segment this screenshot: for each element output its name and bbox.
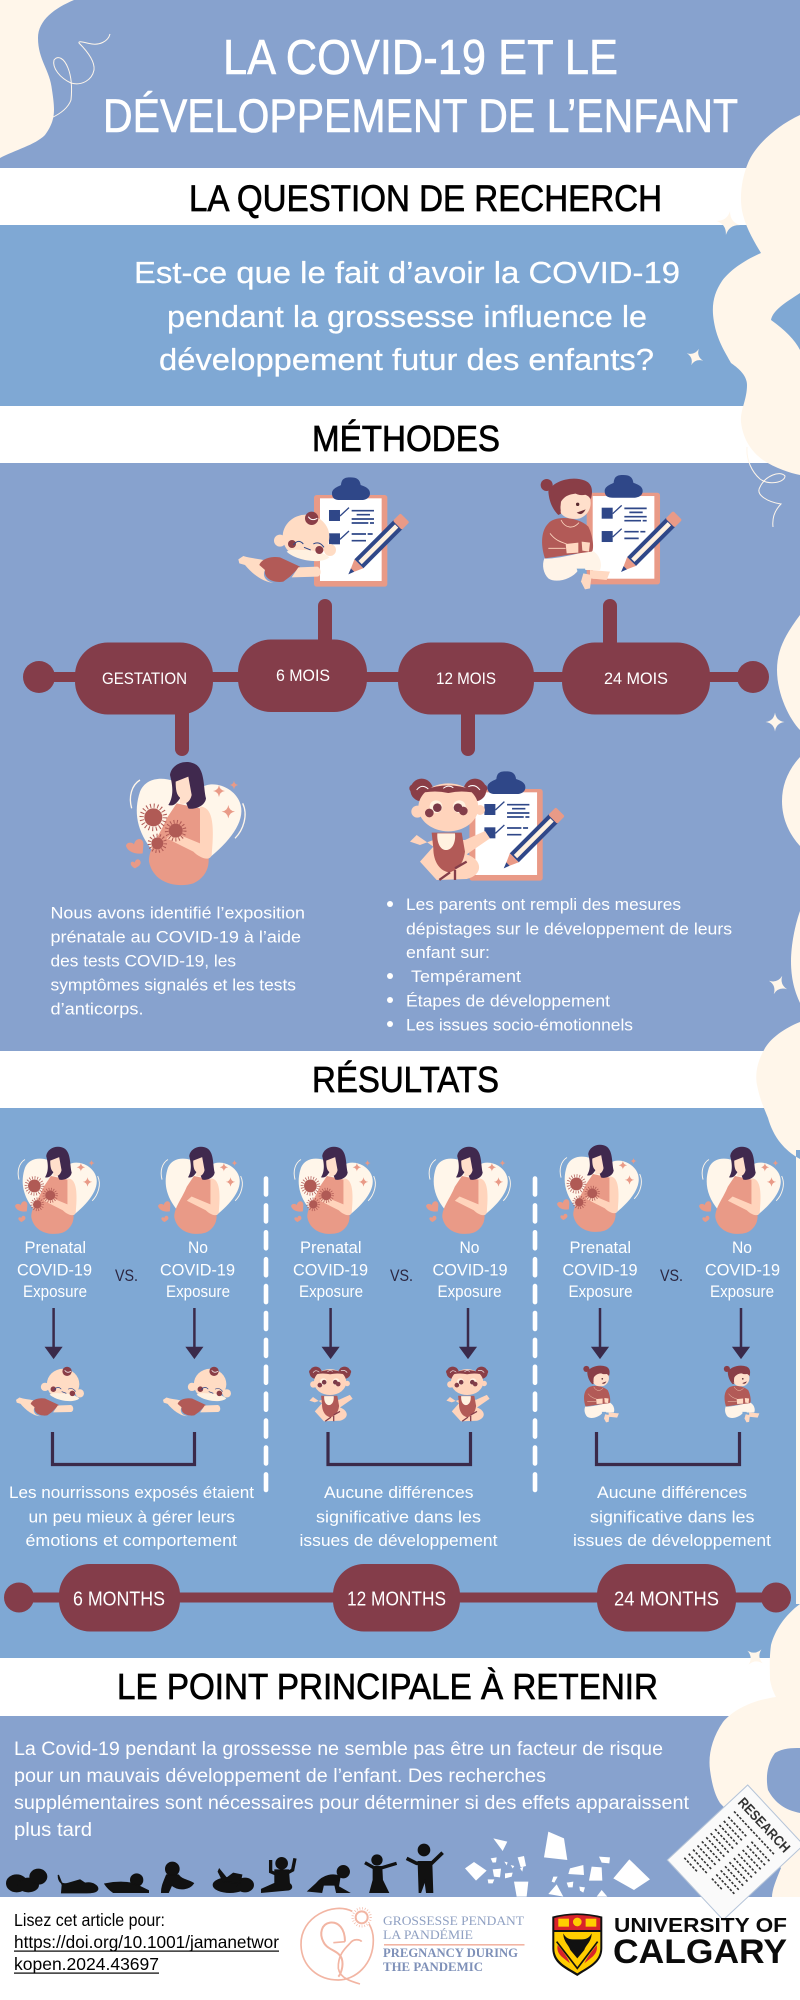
icon: child development silhouettes bbox=[7, 1844, 443, 1893]
text: university wordmark bbox=[613, 1915, 787, 1971]
results column: 12 months bbox=[291, 1147, 510, 1550]
text: logo wordmark: GROSSESSE PENDANT bbox=[383, 1913, 524, 1928]
logo: pregnancy during the pandemic bbox=[301, 1908, 524, 1984]
caption bbox=[573, 1483, 771, 1550]
text block: exposure identification bbox=[50, 904, 305, 1018]
panel: takeaway heading band bbox=[0, 1658, 800, 1716]
label: no exposure: COVID-19 bbox=[160, 1262, 235, 1280]
decorative stars bbox=[683, 209, 791, 1671]
text block: article link: kopen.2024.43697 bbox=[14, 1954, 159, 1974]
decorative cream blob right upper bbox=[713, 115, 800, 475]
label: prenatal exposure: Prenatal bbox=[24, 1239, 86, 1257]
text block: research question bbox=[134, 255, 680, 377]
label: prenatal exposure: Exposure bbox=[23, 1283, 87, 1301]
panel: takeaway background bbox=[0, 1716, 800, 1897]
decorative cream blob right 2 bbox=[777, 615, 800, 730]
label: no exposure: COVID-19 bbox=[432, 1262, 508, 1280]
text block: article link: https://doi.org/10.1001/jamanetwor bbox=[14, 1932, 279, 1952]
label: no exposure: Exposure bbox=[710, 1283, 774, 1301]
text: logo wordmark: PREGNANCY DURING bbox=[383, 1945, 518, 1960]
text block: parent measures list: Les parents ont rempli des mesures bbox=[406, 895, 681, 914]
text: university wordmark: UNIVERSITY OF bbox=[614, 1915, 787, 1937]
icon: woman without virus bbox=[426, 1147, 510, 1234]
decorative cream blob right 4 bbox=[791, 911, 800, 1003]
arrow bbox=[188, 1308, 201, 1357]
text block: takeaway: pour un mauvais développement de l’enfant. Des recherches bbox=[14, 1766, 546, 1787]
text block: article link bbox=[14, 1910, 279, 1974]
timeline node: 24 months bbox=[597, 1564, 736, 1632]
logo: university of calgary bbox=[552, 1913, 787, 1976]
caption: Les nourrissons exposés étaient bbox=[9, 1483, 254, 1502]
text block: parent measures list: Les issues socio-émotionnels bbox=[406, 1016, 633, 1034]
icon: toddler bbox=[309, 1367, 353, 1421]
title: LA COVID-19 ET LE bbox=[223, 31, 618, 85]
timeline node: 24 mois: 24 MOIS bbox=[604, 669, 668, 688]
label: prenatal exposure: COVID-19 bbox=[17, 1262, 92, 1280]
icon: sitting child bbox=[724, 1366, 759, 1422]
label: no exposure bbox=[432, 1239, 508, 1301]
text block: takeaway: plus tard bbox=[14, 1820, 92, 1841]
label: no exposure: No bbox=[188, 1239, 208, 1257]
panel: research question background bbox=[0, 225, 800, 406]
label: no exposure: Exposure bbox=[438, 1283, 502, 1301]
label: prenatal exposure bbox=[562, 1239, 638, 1301]
label: no exposure: COVID-19 bbox=[705, 1262, 780, 1280]
caption: issues de développement bbox=[300, 1531, 498, 1550]
timeline node: 6 months: 6 MONTHS bbox=[73, 1588, 165, 1610]
timeline node: 12 months: 12 MONTHS bbox=[347, 1588, 446, 1610]
label: vs: VS. bbox=[390, 1266, 413, 1285]
timeline node: 6 mois: 6 MOIS bbox=[276, 666, 330, 685]
icon: woman with virus bbox=[15, 1147, 99, 1234]
decorative cream blob bottom right bbox=[710, 1604, 800, 1897]
panel: results background bbox=[0, 1108, 800, 1658]
label: prenatal exposure: Prenatal bbox=[300, 1239, 362, 1257]
text: university wordmark: CALGARY bbox=[613, 1933, 787, 1971]
label: prenatal exposure: COVID-19 bbox=[293, 1262, 368, 1280]
caption: issues de développement bbox=[573, 1531, 771, 1550]
label: no exposure bbox=[160, 1239, 235, 1301]
results column: 6 months bbox=[9, 1147, 254, 1550]
text block: research question: pendant la grossesse influence le bbox=[167, 299, 647, 334]
caption: Aucune différences bbox=[324, 1483, 474, 1502]
results column: 24 months bbox=[557, 1145, 783, 1550]
text block: takeaway: supplémentaires sont nécessaires pour déterminer si des effets apparaissent bbox=[14, 1793, 690, 1814]
text block: research question: Est-ce que le fait d’avoir la COVID-19 bbox=[134, 255, 680, 290]
icon: research paper: RESEARCH bbox=[735, 1794, 794, 1856]
icon: baby bbox=[16, 1367, 84, 1416]
heading: méthodes: MÉTHODES bbox=[312, 418, 500, 459]
icon: baby bbox=[163, 1367, 231, 1416]
decorative squiggle methods bbox=[747, 447, 785, 527]
label: no exposure: No bbox=[732, 1239, 752, 1257]
arrow bbox=[461, 1308, 475, 1357]
text block: takeaway bbox=[14, 1739, 690, 1841]
panel: title background bbox=[0, 0, 800, 168]
label: prenatal exposure bbox=[17, 1239, 92, 1301]
text: logo wordmark: THE PANDEMIC bbox=[383, 1959, 483, 1974]
caption: émotions et comportement bbox=[26, 1531, 237, 1550]
icon: child with questionnaire 24 months bbox=[541, 475, 682, 589]
caption bbox=[300, 1483, 498, 1550]
icon: flying paper scraps bbox=[465, 1832, 650, 1897]
timeline: results bbox=[4, 1564, 791, 1632]
heading: la question de recherche: LA QUESTION DE RECHERCH bbox=[189, 178, 662, 219]
panel: results heading band bbox=[0, 1051, 800, 1108]
icon: baby with questionnaire 6 months bbox=[238, 477, 409, 587]
text block: parent measures list: Étapes de développement bbox=[406, 992, 610, 1010]
label: vs: VS. bbox=[660, 1266, 683, 1285]
icon: woman with virus bbox=[291, 1147, 375, 1234]
label: prenatal exposure: COVID-19 bbox=[562, 1262, 638, 1280]
text block: exposure identification: symptômes signalés et les tests bbox=[50, 976, 296, 994]
arrow bbox=[734, 1308, 748, 1357]
timeline node: 12 mois: 12 MOIS bbox=[436, 669, 496, 688]
icon: woman without virus bbox=[158, 1147, 242, 1234]
timeline node: 12 months bbox=[333, 1564, 460, 1632]
bracket bbox=[52, 1432, 194, 1464]
text block: takeaway: La Covid-19 pendant la grossesse ne semble pas être un facteur de risque bbox=[14, 1739, 663, 1760]
icon: sitting child bbox=[583, 1366, 619, 1422]
text block: article link: Lisez cet article pour: bbox=[14, 1910, 165, 1930]
caption bbox=[9, 1483, 254, 1550]
icon: toddler with questionnaire 12 months bbox=[409, 771, 565, 881]
text block: parent measures list: Tempérament bbox=[411, 967, 521, 986]
label: prenatal exposure: Exposure bbox=[568, 1283, 632, 1301]
timeline node: 12 mois bbox=[398, 642, 534, 714]
text block: exposure identification: d’anticorps. bbox=[50, 1000, 144, 1018]
timeline: methods bbox=[23, 599, 769, 756]
icon: university shield bbox=[552, 1913, 602, 1976]
bracket bbox=[596, 1432, 740, 1464]
timeline node: 6 months bbox=[59, 1564, 180, 1632]
text: logo wordmark bbox=[383, 1913, 524, 1974]
arrow bbox=[324, 1308, 337, 1357]
icon: logo mark bbox=[301, 1908, 373, 1984]
label: prenatal exposure: Prenatal bbox=[570, 1239, 631, 1257]
text block: exposure identification: Nous avons identifié l’exposition bbox=[50, 904, 305, 922]
label: prenatal exposure bbox=[293, 1239, 368, 1301]
text block: research question: développement futur des enfants? bbox=[159, 342, 654, 377]
icon: research paper bbox=[667, 1785, 800, 1920]
decorative squiggle top left bbox=[51, 34, 110, 118]
icon: toddler bbox=[446, 1367, 490, 1421]
timeline node: gestation: GESTATION bbox=[102, 669, 187, 688]
panel: footer background bbox=[0, 1897, 800, 2000]
arrow bbox=[47, 1308, 60, 1357]
panel: methods background bbox=[0, 463, 800, 1051]
timeline node: 24 months: 24 MONTHS bbox=[614, 1588, 719, 1610]
caption: significative dans les bbox=[590, 1508, 754, 1526]
timeline node: 6 mois bbox=[238, 640, 367, 712]
caption: significative dans les bbox=[316, 1508, 481, 1526]
text block: parent measures list: dépistages sur le développement de leurs bbox=[406, 920, 732, 938]
text block: parent measures list: enfant sur: bbox=[406, 943, 490, 962]
decorative cream blob top left bbox=[0, 0, 74, 158]
icon: pregnant woman with virus bbox=[126, 762, 245, 885]
text block: exposure identification: des tests COVID-19, les bbox=[50, 952, 236, 970]
caption: Aucune différences bbox=[597, 1483, 747, 1502]
timeline node: 24 mois bbox=[562, 642, 710, 714]
title bbox=[103, 31, 738, 142]
label: vs: VS. bbox=[115, 1266, 138, 1285]
bracket bbox=[328, 1432, 470, 1464]
text: logo wordmark: LA PANDÉMIE bbox=[383, 1927, 473, 1942]
panel: methods heading band bbox=[0, 406, 800, 463]
arrow bbox=[593, 1308, 607, 1357]
label: prenatal exposure: Exposure bbox=[299, 1283, 363, 1301]
label: no exposure: No bbox=[460, 1239, 480, 1257]
panel: question heading band bbox=[0, 168, 800, 225]
heading: résultats: RÉSULTATS bbox=[312, 1059, 499, 1100]
icon: woman without virus bbox=[699, 1147, 783, 1234]
label: no exposure bbox=[705, 1239, 780, 1301]
label: no exposure: Exposure bbox=[166, 1283, 230, 1301]
timeline node: gestation bbox=[75, 642, 213, 714]
heading: le point principale à retenir: LE POINT PRINCIPALE À RETENIR bbox=[117, 1666, 658, 1707]
icon: woman with virus bbox=[557, 1145, 641, 1232]
caption: un peu mieux à gérer leurs bbox=[28, 1508, 235, 1526]
text block: parent measures list bbox=[387, 895, 732, 1034]
decorative cream blob right 5 bbox=[756, 1022, 800, 1604]
text block: exposure identification: prénatale au COVID-19 à l’aide bbox=[50, 928, 301, 946]
decorative cream blob right 3 bbox=[782, 757, 800, 846]
